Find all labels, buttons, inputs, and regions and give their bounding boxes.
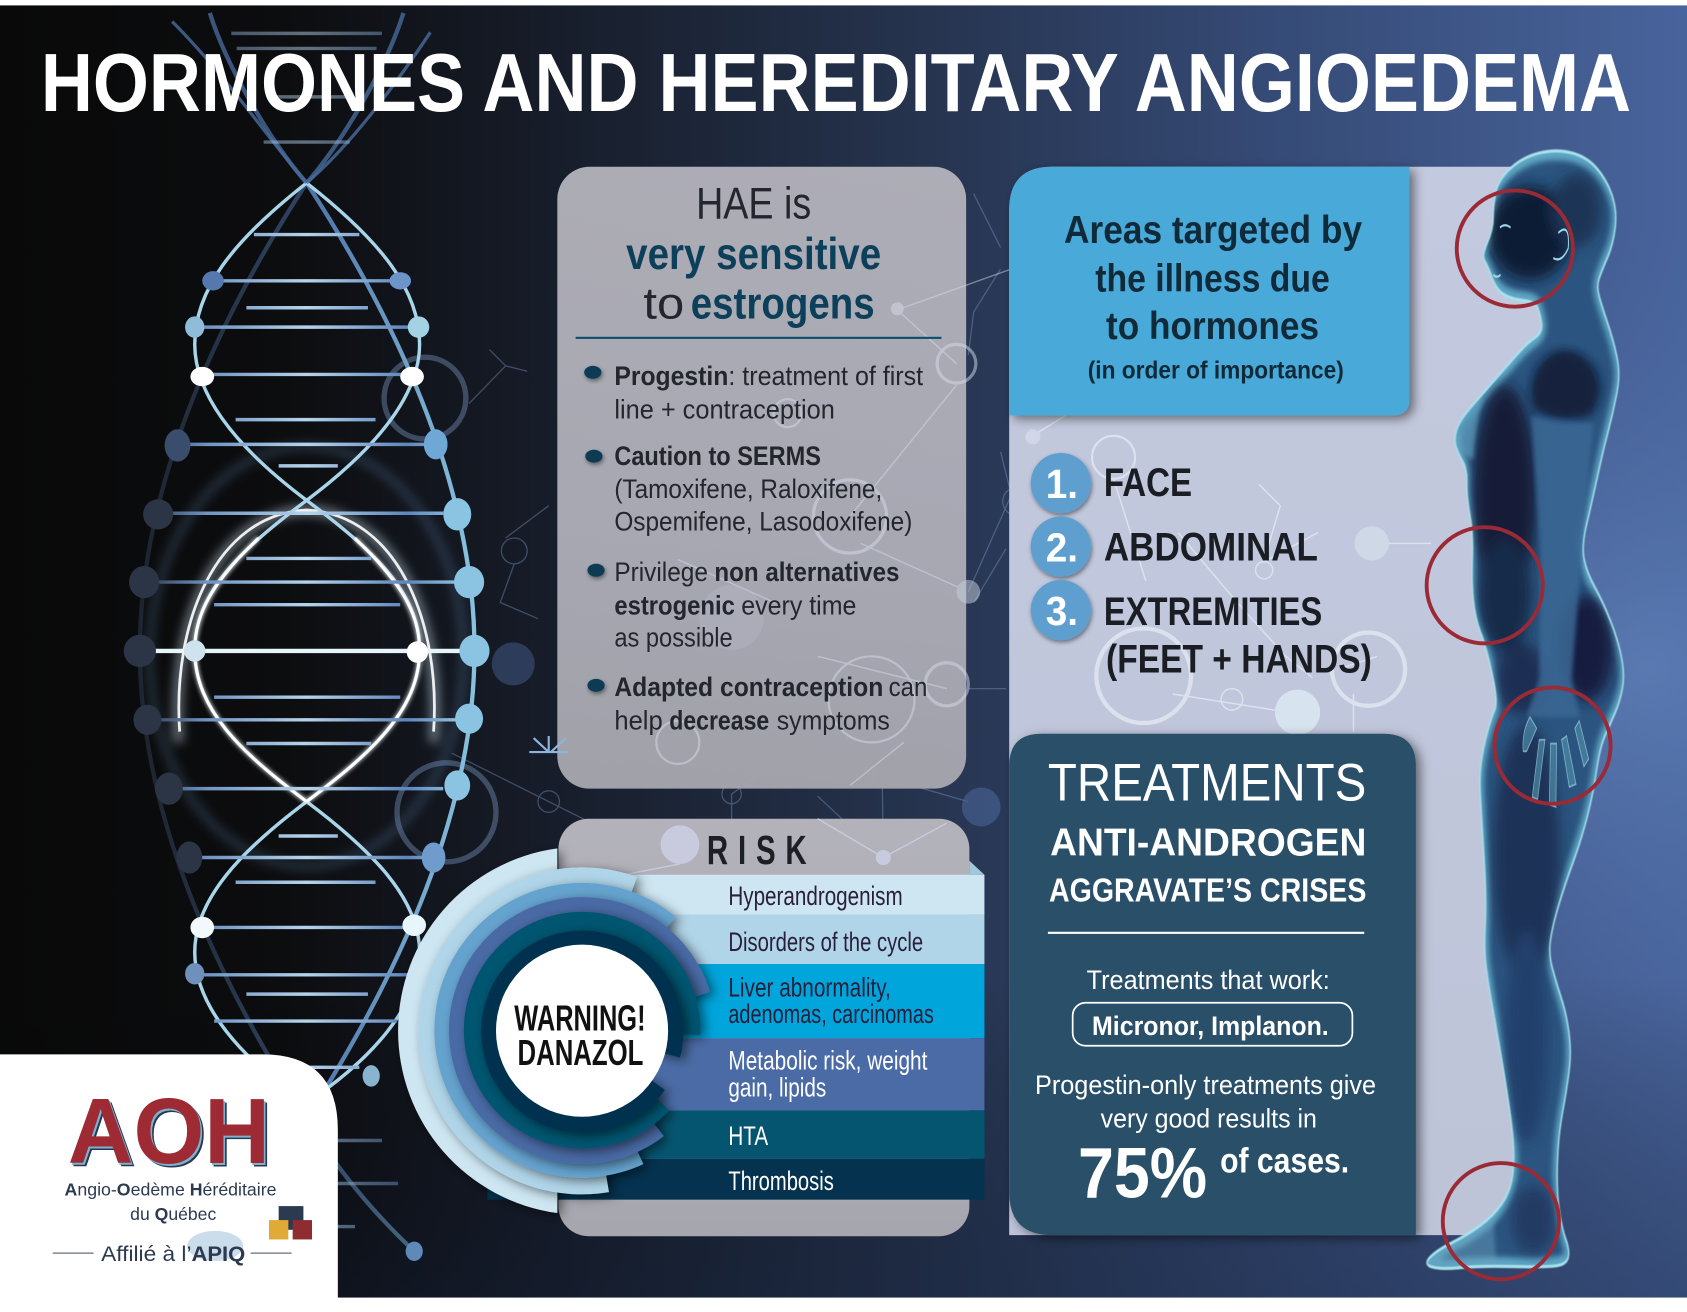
logo AOH: AOH: [69, 1081, 272, 1185]
bullet: progestin: [584, 361, 924, 425]
heading: [626, 179, 881, 328]
dark shading: [1473, 173, 1613, 1254]
item 1: 1.: [1046, 461, 1078, 507]
affiliation line: Affilié à l’: [101, 1242, 192, 1266]
icon: small arrows glyph: [529, 736, 568, 752]
treatments background: [1009, 734, 1416, 1235]
affiliation line: [53, 1231, 292, 1266]
heading: HAE is: [696, 179, 811, 228]
risk labels: Thrombosis: [728, 1166, 834, 1196]
center warning: [514, 998, 646, 1073]
bullet: privilege: [587, 557, 899, 653]
rungs: [140, 33, 474, 1227]
header box: areas targeted: (in order of importance): [1088, 358, 1344, 385]
bullet: privilege: every time: [741, 590, 856, 620]
item 3: (FEET + HANDS): [1106, 637, 1372, 681]
logo AOH: AOH: [71, 1082, 273, 1186]
bullet: progestin: line + contraception: [614, 395, 835, 425]
bullet: contraception: decrease: [669, 705, 769, 735]
beads left: [124, 271, 241, 1080]
bullet: caution: Caution to SERMS: [614, 441, 821, 471]
header box: areas targeted: Areas targeted by: [1064, 209, 1362, 252]
bullet: privilege: Privilege: [614, 557, 708, 587]
panel network overlay: [1025, 409, 1431, 735]
inner rim glow: [1427, 151, 1623, 1268]
item 3: 3.: [1046, 588, 1078, 634]
panel background: [557, 167, 966, 789]
center warning: WARNING!: [514, 998, 646, 1039]
panel: treatments: AGGRAVATE’S CRISES: [1049, 873, 1366, 910]
risk card: [558, 819, 969, 1236]
risk rows: [487, 875, 984, 1200]
panel: treatments: TREATMENTS: [1048, 753, 1366, 812]
risk labels: [728, 881, 934, 1196]
bullet: caution: (Tamoxifene, Raloxifene,: [614, 474, 882, 504]
item 1: [1031, 453, 1192, 513]
fold corner: [969, 861, 984, 875]
risk labels: Liver abnormality,: [728, 972, 891, 1002]
ranked list: [1031, 453, 1372, 681]
bullet: privilege: as possible: [614, 623, 733, 653]
bullet: caution: Ospemifene, Lasodoxifene): [614, 506, 912, 536]
body outline: [1427, 151, 1623, 1268]
risk labels: Disorders of the cycle: [728, 927, 923, 957]
bullet: contraception: [587, 672, 927, 735]
bullet: caution: [585, 441, 912, 536]
light panel background: [1009, 167, 1545, 1235]
risk labels: HTA: [728, 1121, 768, 1151]
item 3: [1031, 580, 1372, 681]
foot highlight: [1441, 1224, 1497, 1262]
header box: areas targeted: to hormones: [1106, 305, 1319, 348]
wide strands: [140, 13, 474, 1280]
heading: to: [643, 279, 684, 328]
heading: estrogens: [691, 279, 875, 328]
beads right: [363, 272, 490, 1261]
faint glow arcs: [150, 447, 464, 866]
panel: treatments: Treatments that work:: [1087, 965, 1330, 995]
item 3: EXTREMITIES: [1104, 590, 1322, 634]
heading: very sensitive: [626, 230, 881, 279]
risk labels: Metabolic risk, weight: [728, 1045, 928, 1075]
logo AOH: AOH: [68, 1079, 270, 1183]
header box: areas targeted: the illness due: [1095, 258, 1330, 301]
risk labels: gain, lipids: [728, 1072, 826, 1102]
bullet: contraception: help: [614, 705, 663, 735]
center warning: DANAZOL: [518, 1032, 643, 1073]
human body figure: [1426, 148, 1625, 1271]
background molecule network: [384, 194, 1031, 862]
panel: treatments: ANTI-ANDROGEN: [1050, 821, 1366, 864]
rings: [398, 848, 710, 1213]
panel network overlay: [656, 269, 1011, 785]
bullet: contraception: can: [889, 672, 927, 702]
chest highlight: [1455, 397, 1483, 459]
bullet: privilege: estrogenic: [614, 590, 735, 620]
risk labels: adenomas, carcinomas: [728, 999, 934, 1029]
face details: [1493, 225, 1568, 277]
risk labels: Hyperandrogenism: [728, 881, 903, 911]
statistic: 75%: [1078, 1134, 1207, 1213]
bullet: progestin: : treatment of first: [728, 361, 924, 391]
hand: [1523, 717, 1589, 807]
item 2: 2.: [1046, 525, 1078, 571]
logo panel: [0, 1054, 338, 1299]
bullet: progestin: Progestin: [614, 361, 728, 391]
item 2: [1031, 516, 1318, 577]
bullet: contraception: symptoms: [777, 705, 890, 735]
arm: [1527, 416, 1593, 717]
shoulder cap: [1532, 351, 1598, 417]
bullet: privilege: non alternatives: [714, 557, 899, 587]
panel: risk: [398, 819, 984, 1236]
DNA double helix: [124, 13, 490, 1280]
panel: HAE sensitivity: [557, 167, 1011, 789]
treatment pill: Micronor, Implanon.: [1092, 1011, 1329, 1041]
affiliation line: APIQ: [192, 1242, 245, 1266]
item 2: ABDOMINAL: [1104, 526, 1318, 570]
statistic: [1078, 1134, 1349, 1213]
statistic: of cases.: [1220, 1141, 1349, 1181]
target circles: [1427, 190, 1611, 1279]
panel: treatments: very good results in: [1101, 1104, 1317, 1134]
item 1: FACE: [1104, 461, 1192, 505]
panel: treatments: Progestin-only treatments give: [1035, 1070, 1376, 1100]
logo panel: du Québec: [130, 1204, 217, 1224]
header box: areas targeted: [1009, 167, 1409, 415]
panel: areas targeted: [1009, 167, 1545, 1235]
logo panel: Angio-Oedème Héréditaire: [65, 1179, 277, 1199]
bright helix glow: [195, 538, 420, 802]
treatment pill: [1073, 1003, 1352, 1046]
logo squares: [269, 1206, 312, 1239]
bullet: contraception: Adapted contraception: [614, 672, 883, 702]
bright strands: [172, 22, 430, 1103]
risk heading: RISK: [707, 827, 817, 873]
panel: treatments: [1009, 734, 1416, 1235]
